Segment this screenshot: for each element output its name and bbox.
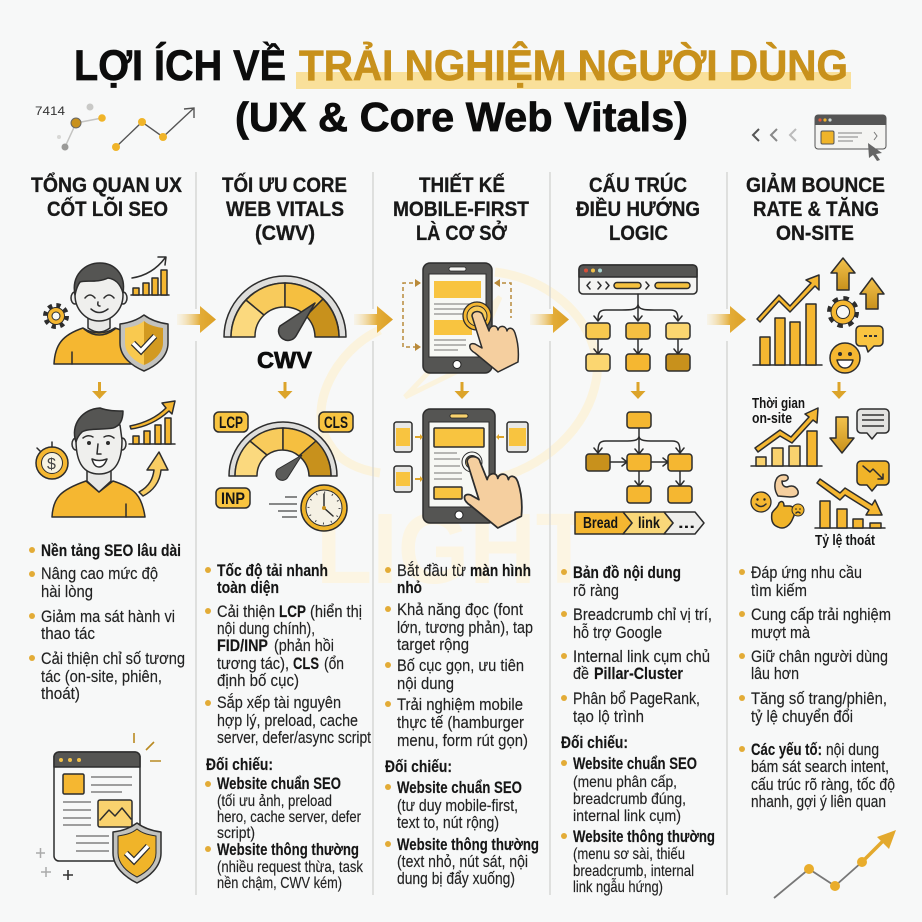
text: column 2 bullets: Tốc độ tải nhanh xyxy=(217,561,328,580)
text: column 1 bullets: thoát) xyxy=(41,684,80,703)
small phone top left xyxy=(394,422,412,452)
text: column 5 bullets: Giữ chân người dùng xyxy=(751,647,888,666)
text: column 4 bullets: (menu sơ sài, thiếu xyxy=(573,846,685,863)
icon: on-site time chart xyxy=(751,396,822,466)
text: column 2 bullets: (hiển thị xyxy=(310,602,362,621)
text: column 5 bullets: nhanh, gợi ý liên quan xyxy=(751,792,886,811)
text: column 5 bullets: tìm kiếm xyxy=(751,581,807,600)
text: column 5 bullets: cấu trúc rõ ràng, tốc độ xyxy=(751,775,895,794)
text: column 2 bullets: định bố cục) xyxy=(217,671,299,690)
decoration: network and trend: 7414 xyxy=(35,104,65,118)
label: on-site time: Thời gian xyxy=(752,396,805,412)
text: column 5 bullets: nội dung xyxy=(826,740,879,759)
tag: CLS: CLS xyxy=(324,413,348,432)
text: column 3 bullets: (tư duy mobile-first, xyxy=(397,796,518,815)
heading column 4: LOGIC xyxy=(609,222,668,245)
text: column 4 bullets: Đối chiếu: xyxy=(561,733,628,752)
small phone right xyxy=(507,422,528,452)
heading column 5: RATE & TĂNG xyxy=(753,198,879,221)
arrow: down column 3 xyxy=(454,382,470,399)
heading column 4: ĐIỀU HƯỚNG xyxy=(576,197,700,221)
icon: pillar cluster link tree xyxy=(586,412,692,503)
text: column 2 bullets: (phản hồi xyxy=(274,636,334,655)
text: column 4 bullets: Website thông thường xyxy=(573,827,715,846)
text: column 2 bullets: hero, cache server, defer xyxy=(217,809,362,826)
breadcrumb bar: ... xyxy=(678,515,695,532)
text: column 4 bullets: link ngẫu hứng) xyxy=(573,877,663,896)
icon: phone with tap gesture xyxy=(403,263,518,373)
arrow: column 4 to 5 xyxy=(707,306,746,333)
text: column 2 bullets: (tối ưu ảnh, preload xyxy=(217,793,332,810)
heading column 1: CỐT LÕI SEO xyxy=(47,197,168,221)
heading column 2: TỐI ƯU CORE xyxy=(222,173,347,197)
icon: clock xyxy=(269,485,347,531)
text: column 4 bullets: tạo lộ trình xyxy=(573,707,644,726)
text: column 3 bullets: Bố cục gọn, ưu tiên xyxy=(397,656,524,675)
text: column 2 bullets: script) xyxy=(217,825,255,842)
title xyxy=(74,41,851,140)
heading column 4: CẤU TRÚC xyxy=(589,173,687,197)
text: column 4 bullets: Website chuẩn SEO xyxy=(573,754,697,773)
heading column 2 xyxy=(222,173,347,245)
watermark logo: LIGHT xyxy=(316,493,592,605)
text: column 5 bullets: Đáp ứng nhu cầu xyxy=(751,563,862,582)
arrow: column 3 to 4 xyxy=(530,306,569,333)
text: column 4 bullets: hỗ trợ Google xyxy=(573,623,662,642)
icon: happy user with shield and chart xyxy=(46,257,169,371)
text: column 2 bullets: Website chuẩn SEO xyxy=(217,774,341,793)
heading column 3: LÀ CƠ SỞ xyxy=(416,221,507,245)
icon: site navigation tree xyxy=(579,265,697,371)
text: column 2 bullets xyxy=(205,561,371,892)
text: column 1 bullets: Nâng cao mức độ xyxy=(41,564,158,583)
text: column 4 bullets: Breadcrumb chỉ vị trí, xyxy=(573,605,712,624)
text: column 5 bullets xyxy=(739,563,895,811)
text: column 5 bullets: Các yếu tố: xyxy=(751,740,822,759)
text: column 1 bullets: thao tác xyxy=(41,624,95,643)
text: column 4 bullets: đề xyxy=(573,664,589,683)
text: column 2 bullets: Website thông thường xyxy=(217,840,359,859)
text: column 3 bullets: thực tế (hamburger xyxy=(397,713,524,732)
text: column 4 bullets: Phân bổ PageRank, xyxy=(573,689,700,708)
decoration: network and trend xyxy=(35,104,194,151)
text: column 3 bullets: target rộng xyxy=(397,635,469,654)
heading column 1: TỔNG QUAN UX xyxy=(31,173,182,197)
label: on-site time: on-site xyxy=(752,411,792,427)
title line 1 gold: TRẢI NGHIỆM NGƯỜI DÙNG xyxy=(299,41,848,90)
icon: growth chart with arrows, gear, smiley xyxy=(753,258,884,373)
tag: LCP: LCP xyxy=(219,413,243,432)
text: column 3 bullets: menu, form rút gọn) xyxy=(397,731,528,750)
heading column 5 xyxy=(746,174,885,245)
icon: big down arrow xyxy=(830,417,854,453)
text: column 3 bullets: lớn, tương phản), tap xyxy=(397,618,533,637)
text: column 4 bullets: Bản đồ nội dung xyxy=(573,563,681,582)
arrow: down column 5 xyxy=(832,382,846,399)
text: column 5 bullets: Cung cấp trải nghiệm xyxy=(751,605,891,624)
arrow: column 1 to 2 xyxy=(177,306,216,333)
text: column 2 bullets: CLS xyxy=(293,654,319,673)
small phone bottom left xyxy=(394,466,412,492)
text: column 4 bullets: Internal link cụm chủ xyxy=(573,647,710,666)
text: column 4 bullets: Pillar-Cluster xyxy=(594,664,683,683)
text: column 2 bullets: Cải thiện xyxy=(217,602,275,621)
label: on-site time xyxy=(752,396,805,427)
icon: smiling user with growth and coin xyxy=(36,401,175,517)
text: column 4 bullets: breadcrumb, internal xyxy=(573,863,694,880)
title line 1 black: LỢI ÍCH VỀ xyxy=(74,42,286,90)
icon: smiling user with growth and coin: $ xyxy=(47,456,56,473)
label: bounce rate: Tỷ lệ thoát xyxy=(815,532,875,549)
text: column 4 bullets: (menu phân cấp, xyxy=(573,774,677,791)
heading column 2: WEB VITALS xyxy=(226,198,344,221)
title line 2: (UX & Core Web Vitals) xyxy=(235,94,688,140)
heading column 3 xyxy=(393,174,529,245)
text: column 3 bullets: nội dung xyxy=(397,674,454,693)
text: column 2 bullets: Sắp xếp tài nguyên xyxy=(217,693,341,712)
text: column 4 bullets xyxy=(561,563,715,896)
text: column 3 bullets xyxy=(385,561,539,888)
text: column 4 bullets: internal link cụm) xyxy=(573,808,681,825)
breadcrumb bar xyxy=(575,512,704,534)
icon: falling bounce rate chart xyxy=(815,479,885,549)
text: column 3 bullets: Khả năng đọc (font xyxy=(397,600,523,619)
text: column 1 bullets: hài lòng xyxy=(41,582,93,601)
title highlight xyxy=(296,72,851,89)
decoration: bottom trend line xyxy=(774,830,896,898)
text: column 2 bullets: toàn diện xyxy=(217,578,279,597)
text: column 2 bullets: server, defer/async script xyxy=(217,728,371,747)
icon: smiley, muscle and thumb xyxy=(751,475,804,528)
text: column 1 bullets: Giảm ma sát hành vi xyxy=(41,607,175,626)
text: column 5 bullets: tỷ lệ chuyển đổi xyxy=(751,707,853,726)
text: column 3 bullets: Trải nghiệm mobile xyxy=(397,695,523,714)
text: column 2 bullets: tương tác), xyxy=(217,654,289,673)
heading column 4 xyxy=(576,173,700,245)
text: column 3 bullets: dung bị đẩy xuống) xyxy=(397,869,515,888)
text: column 3 bullets: text to, nút rộng) xyxy=(397,813,499,832)
text: column 2 bullets: Đối chiếu: xyxy=(206,755,273,774)
text: column 1 bullets: tác (on-site, phiên, xyxy=(41,667,162,686)
text: column 3 bullets: Đối chiếu: xyxy=(385,757,452,776)
decoration: browser with cursor xyxy=(753,115,886,161)
column headings xyxy=(31,173,885,245)
arrow: down column 2 xyxy=(278,382,292,399)
icon: web page with shield xyxy=(36,733,161,883)
heading column 3: MOBILE-FIRST xyxy=(393,198,529,221)
text: column 3 bullets: Bắt đầu từ xyxy=(397,561,466,580)
arrow: down column 1 xyxy=(92,382,107,399)
text: column 1 bullets: Nền tảng SEO lâu dài xyxy=(41,541,181,560)
icon: gray speech bubble xyxy=(857,409,889,439)
heading column 5: ON-SITE xyxy=(776,222,854,245)
text: column 3 bullets: Website chuẩn SEO xyxy=(397,778,522,797)
text: column 2 bullets: nền chậm, CWV kém) xyxy=(217,875,342,892)
text: column 5 bullets: Tăng số trang/phiên, xyxy=(751,689,887,708)
text: column 3 bullets: nhỏ xyxy=(397,578,422,597)
text: column 1 bullets: Cải thiện chỉ số tương xyxy=(41,649,185,668)
arrow: column 2 to 3 xyxy=(354,306,393,333)
heading column 3: THIẾT KẾ xyxy=(419,174,505,197)
text: column 2 bullets: FID/INP xyxy=(217,636,268,655)
text: column 2 bullets: (ổn xyxy=(324,654,344,673)
text: column 3 bullets: màn hình xyxy=(470,561,531,580)
icon: LCP INP CLS gauge with clock xyxy=(214,412,353,531)
arrow: down column 4 xyxy=(630,382,646,399)
text: column 2 bullets: LCP xyxy=(279,602,306,621)
text: column 2 bullets: hợp lý, preload, cache xyxy=(217,711,358,730)
text: column 5 bullets: bám sát search intent, xyxy=(751,757,889,776)
text: column 5 bullets: lâu hơn xyxy=(751,664,799,683)
heading column 5: GIẢM BOUNCE xyxy=(746,174,885,197)
icon: responsive devices with tap xyxy=(394,409,528,528)
heading column 2: (CWV) xyxy=(255,222,315,245)
heading column 1 xyxy=(31,173,182,221)
text: column 1 bullets xyxy=(29,541,185,703)
text: column 4 bullets: rõ ràng xyxy=(573,581,619,600)
icon: CWV gauge xyxy=(224,276,346,373)
breadcrumb bar: link xyxy=(638,515,660,532)
text: column 2 bullets: (nhiều request thừa, task xyxy=(217,859,364,876)
breadcrumb bar: Bread xyxy=(583,515,618,532)
icon: CWV gauge: CWV xyxy=(257,347,313,373)
icon: yellow speech bubble with falling trend xyxy=(857,461,889,491)
text: column 3 bullets: Website thông thường xyxy=(397,835,539,854)
text: column 3 bullets: (text nhỏ, nút sát, nội xyxy=(397,852,528,871)
text: column 4 bullets: breadcrumb đúng, xyxy=(573,791,686,808)
tag: INP: INP xyxy=(221,489,245,508)
text: column 5 bullets: mượt mà xyxy=(751,623,810,642)
text: column 2 bullets: nội dung chính), xyxy=(217,619,315,638)
watermark logo xyxy=(316,272,597,605)
column dividers xyxy=(196,172,727,895)
